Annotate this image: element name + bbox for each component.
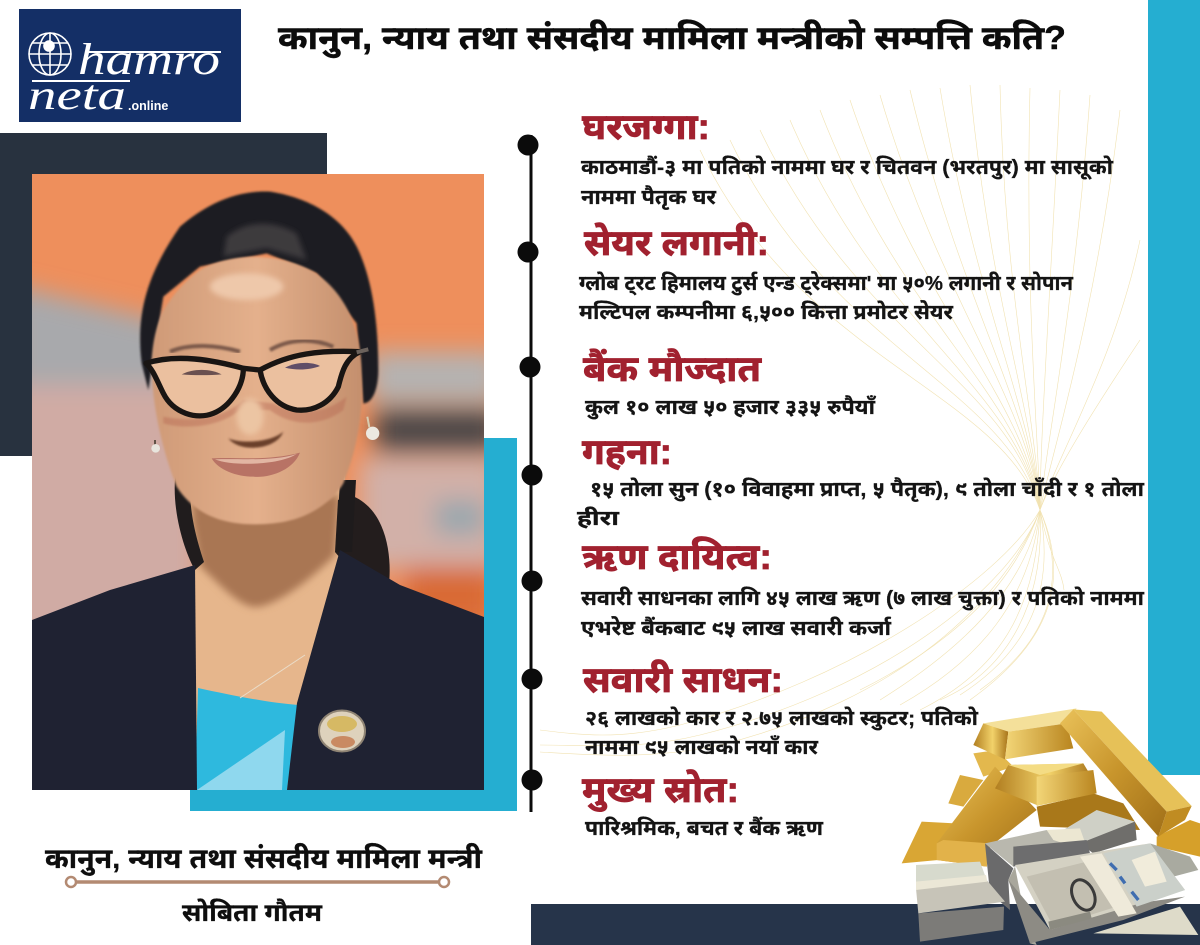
back gold	[1157, 820, 1200, 857]
left low bar	[902, 822, 955, 863]
section: vehicles: सवारी साधन:	[583, 659, 783, 700]
section: main source: पारिश्रमिक, बचत र बैंक ऋण	[585, 816, 824, 840]
mouth	[212, 453, 300, 477]
forehead highlight	[210, 273, 283, 300]
middle bar	[995, 763, 1093, 805]
section: main source: मुख्य स्रोत:	[582, 769, 739, 812]
caption: position: कानुन, न्याय तथा संसदीय मामिला मन्त्री	[45, 842, 483, 876]
nose	[237, 398, 263, 435]
big diagonal bar	[1073, 709, 1192, 812]
section: property: घरजग्गा:	[582, 106, 710, 147]
timeline	[518, 134, 542, 812]
head drawn in zoomed crop coordinates	[140, 192, 379, 524]
section: property: काठमाडौं-३ मा पतिको नाममा घर र चितवन (भरतपुर) मा सासूको	[581, 155, 1114, 180]
teal backing block	[190, 438, 517, 811]
side hair strands	[335, 497, 390, 579]
section: vehicles: २६ लाखको कार र २.७५ लाखको स्कुटर; पतिको	[585, 706, 979, 731]
glasses	[146, 349, 368, 416]
main title: कानुन, न्याय तथा संसदीय मामिला मन्त्रीको सम्पत्ति कति?	[278, 19, 1066, 59]
section: bank balance	[583, 348, 876, 420]
section: share investment: मल्टिपल कम्पनीमा ६,५०० कित्ता प्रमोटर सेयर	[579, 300, 954, 324]
logo wordmark: hamro	[78, 35, 220, 84]
front stack	[1008, 867, 1037, 945]
logo globe icon	[29, 33, 71, 75]
logo: Hamro Neta	[19, 9, 241, 122]
jacket	[32, 565, 197, 790]
hair highlight	[223, 224, 307, 260]
caption divider with end rings	[66, 877, 449, 887]
section: bank balance: बैंक मौज्दात	[583, 348, 762, 389]
section: jewellery	[577, 431, 1145, 530]
blouse	[195, 688, 298, 790]
logo: Hamro Neta: neta	[28, 73, 126, 119]
section: jewellery: गहना:	[582, 431, 672, 472]
necklace	[240, 655, 305, 698]
blurred background	[32, 276, 484, 620]
back cash	[1063, 810, 1135, 843]
section: jewellery: १५ तोला सुन (१० विवाहमा प्राप्त, ५ पैतृक), ९ तोला चाँदी र १ तोला	[590, 477, 1145, 502]
brows	[170, 341, 333, 352]
section: main source	[582, 769, 824, 840]
section: liabilities: ऋण दायित्व:	[582, 536, 772, 577]
navy backing block	[0, 133, 327, 456]
section: share investment: ग्लोब ट्रट हिमालय टुर्स एन्ड ट्रेक्समा' मा ५०% लगानी र सोपान	[579, 271, 1073, 296]
eyes	[182, 370, 222, 375]
section: vehicles	[583, 659, 979, 759]
earrings	[154, 440, 156, 444]
cash stack rear	[985, 830, 1060, 867]
chin shadow	[192, 495, 340, 607]
section: share investment	[579, 221, 1073, 324]
hair	[140, 192, 378, 403]
neck and chest	[185, 470, 345, 790]
section: property: नाममा पैतृक घर	[581, 185, 717, 210]
section: liabilities	[581, 536, 1145, 640]
lapel pin	[319, 710, 365, 752]
portrait photo	[10, 174, 500, 790]
logo: Hamro Neta: .online	[128, 99, 168, 113]
section: liabilities: सवारी साधनका लागि ४५ लाख ऋण (७ लाख चुक्ता) र पतिको नाममा	[581, 586, 1145, 611]
section: vehicles: नाममा ९५ लाखको नयाँ कार	[585, 735, 819, 759]
under-glasses shadow	[163, 397, 347, 427]
bottom navy bar	[531, 904, 1200, 945]
diagonal left bar	[937, 767, 1037, 867]
section: bank balance: कुल १० लाख ५० हजार ३३५ रुपैयाँ	[585, 395, 876, 420]
face	[152, 257, 362, 524]
caption: name: सोबिता गौतम	[182, 898, 323, 927]
section: jewellery: हीरा	[577, 506, 620, 530]
section: share investment: सेयर लगानी:	[584, 221, 769, 263]
right teal bar	[1148, 0, 1200, 775]
illustration: gold bars and cash	[902, 708, 1200, 945]
decorative gold line wave	[540, 85, 1140, 755]
section: property	[581, 106, 1114, 210]
section: liabilities: एभरेष्ट बैंकबाट ९५ लाख सवारी कर्जा	[581, 616, 892, 640]
right note	[1150, 843, 1198, 877]
left stack	[918, 907, 1004, 942]
top bar	[983, 708, 1077, 732]
